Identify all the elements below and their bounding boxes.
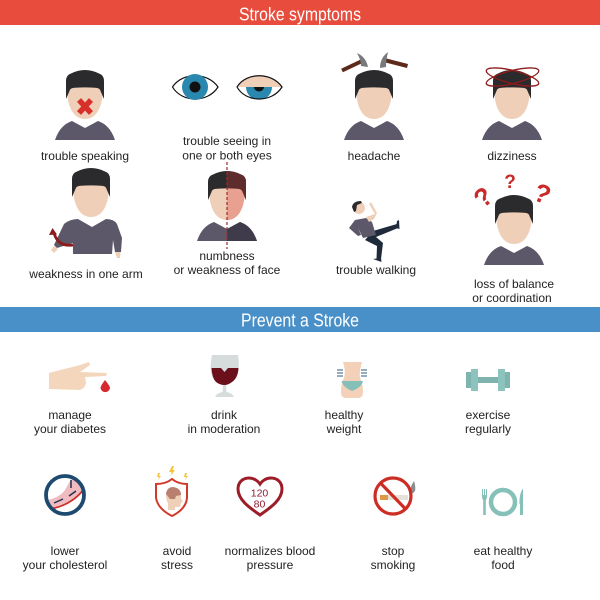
prevention: normalize blood pressure: normalizes blood xyxy=(225,544,315,558)
prevention: avoid stress xyxy=(156,466,193,572)
prevention: lower cholesterol: your cholesterol xyxy=(23,558,107,572)
icon: red cross over mouth xyxy=(79,100,91,113)
prevention: lower cholesterol: lower xyxy=(51,544,79,558)
prevention: eat healthy food: eat healthy xyxy=(474,544,532,558)
symptom: dizziness xyxy=(482,64,542,163)
symptom: weakness in one arm: weakness in one arm xyxy=(28,267,143,281)
symptom: trouble seeing: one or both eyes xyxy=(182,148,272,162)
symptom: loss of balance: or coordination xyxy=(472,291,552,305)
icon: no smoking sign xyxy=(375,478,415,514)
prevention: eat healthy food xyxy=(474,489,532,572)
symptom: loss of balance xyxy=(467,172,555,305)
symptom: trouble speaking: trouble speaking xyxy=(41,149,129,163)
prevention: stop smoking xyxy=(371,478,415,572)
symptom: trouble seeing: trouble seeing in xyxy=(183,134,271,148)
header: stroke symptoms xyxy=(0,0,600,25)
icon: artery xyxy=(46,476,84,514)
icon: open eye xyxy=(172,74,218,100)
prevention: drink in moderation xyxy=(188,355,260,436)
symptom: numbness of face: or weakness of face xyxy=(174,263,281,277)
icon: question marks: ? xyxy=(504,172,516,193)
prevention: healthy weight: healthy xyxy=(325,408,363,422)
symptom: headache xyxy=(342,52,408,163)
prevention: drink in moderation: drink xyxy=(211,408,238,422)
icon: hand with blood drop xyxy=(49,362,110,392)
symptom: trouble walking xyxy=(336,201,416,277)
symptom: loss of balance: loss of balance xyxy=(474,277,554,291)
header: prevent a stroke xyxy=(0,307,600,332)
icon: wine glass xyxy=(211,355,239,397)
icon: body with limp arm xyxy=(54,219,122,254)
icon: affected half of face xyxy=(227,171,257,241)
icon: plate and cutlery xyxy=(482,489,523,515)
symptom: trouble seeing xyxy=(172,70,283,162)
icon: falling man xyxy=(349,201,400,262)
prevention: exercise regularly: exercise xyxy=(466,408,511,422)
icon: dizzy orbits xyxy=(485,64,540,90)
prevention: avoid stress: stress xyxy=(161,558,193,572)
symptom: trouble walking: trouble walking xyxy=(336,263,416,277)
symptom: headache: headache xyxy=(348,149,401,163)
prevention: stop smoking: stop xyxy=(382,544,405,558)
prevention: eat healthy food: food xyxy=(491,558,515,572)
icon: red arrow xyxy=(49,228,73,245)
prevention: lower cholesterol xyxy=(23,476,107,572)
icon: waist xyxy=(337,362,367,398)
icon: shield with head xyxy=(156,466,188,516)
icon: hammers xyxy=(342,52,408,70)
prevention: drink in moderation: in moderation xyxy=(188,422,260,436)
icon: heart with numbers xyxy=(238,478,282,515)
prevention: manage diabetes: your diabetes xyxy=(34,422,106,436)
prevention: healthy weight xyxy=(325,362,367,436)
prevention: healthy weight: weight xyxy=(326,422,362,436)
symptom: dizziness: dizziness xyxy=(487,149,537,163)
prevention: exercise regularly xyxy=(465,369,511,436)
icon: drooping eye xyxy=(236,75,283,100)
prevention: normalize blood pressure: pressure xyxy=(247,558,294,572)
prevention: stop smoking: smoking xyxy=(371,558,415,572)
symptom: numbness of face: numbness xyxy=(199,249,255,263)
symptom: numbness of face xyxy=(174,162,281,277)
symptom: weakness in one arm xyxy=(28,168,143,281)
icon: dumbbell xyxy=(466,369,510,391)
header: stroke symptoms: Stroke symptoms xyxy=(239,4,361,24)
header: prevent a stroke: Prevent a Stroke xyxy=(241,310,359,330)
icon: question marks: ? xyxy=(529,177,555,211)
prevention: manage diabetes: manage xyxy=(48,408,92,422)
prevention: exercise regularly: regularly xyxy=(465,422,511,436)
icon: question marks xyxy=(467,172,555,214)
prevention: manage diabetes xyxy=(34,362,110,436)
prevention: normalize blood pressure xyxy=(225,478,315,572)
icon: heart with numbers: 80 xyxy=(254,498,265,510)
icon: heart with numbers: 120 xyxy=(251,488,268,500)
prevention: avoid stress: avoid xyxy=(163,544,191,558)
symptom: trouble speaking xyxy=(41,70,129,163)
icon: question marks: ? xyxy=(467,181,499,214)
